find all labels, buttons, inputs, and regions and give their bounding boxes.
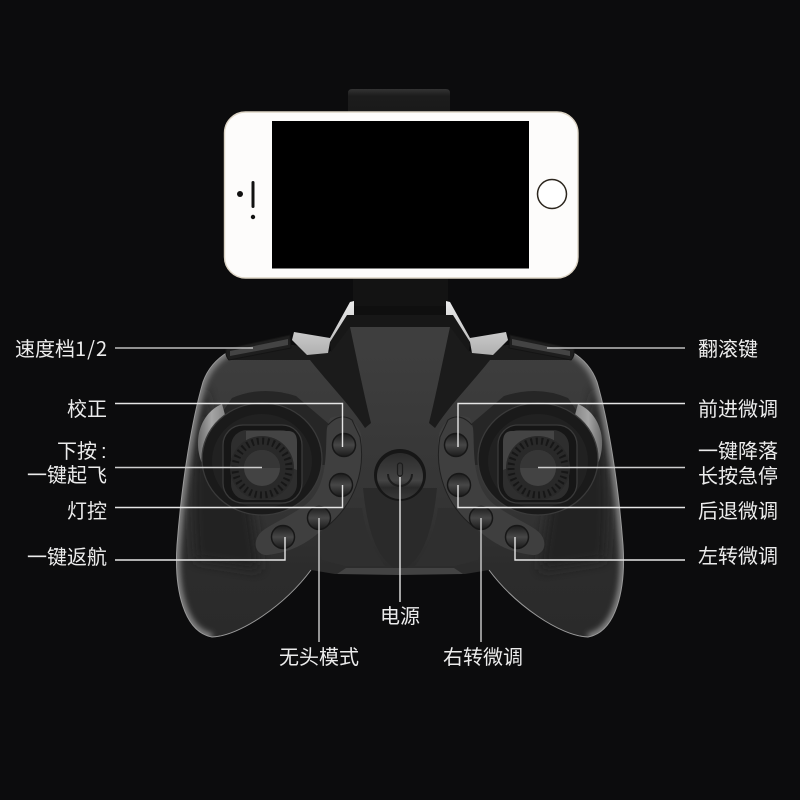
right labels: 后退微调	[698, 500, 778, 523]
bottom labels: 右转微调	[443, 646, 523, 669]
right labels: 一键降落	[698, 440, 778, 463]
controller body	[176, 301, 624, 637]
phone screen	[272, 121, 529, 268]
left labels: 灯控	[67, 500, 107, 523]
left labels: 一键返航	[27, 546, 107, 569]
bottom labels: 无头模式	[279, 646, 359, 669]
left labels: 速度档1/2	[15, 333, 108, 362]
right labels: 前进微调	[698, 398, 778, 421]
phone speaker and camera	[237, 181, 255, 219]
right labels	[698, 338, 778, 568]
phone home button	[538, 180, 566, 208]
bottom labels	[279, 605, 523, 669]
phone holder clamp	[348, 89, 450, 335]
left labels: 一键起飞	[27, 464, 107, 487]
left labels: 校正	[67, 398, 107, 421]
leader lines	[115, 348, 685, 642]
left labels	[15, 333, 108, 569]
right labels: 长按急停	[698, 465, 778, 488]
right labels: 左转微调	[698, 545, 778, 568]
phone	[224, 112, 578, 278]
left labels: 下按:	[57, 440, 107, 463]
power button	[374, 449, 426, 501]
bottom labels: 电源	[380, 605, 420, 628]
right labels: 翻滚键	[698, 338, 758, 361]
